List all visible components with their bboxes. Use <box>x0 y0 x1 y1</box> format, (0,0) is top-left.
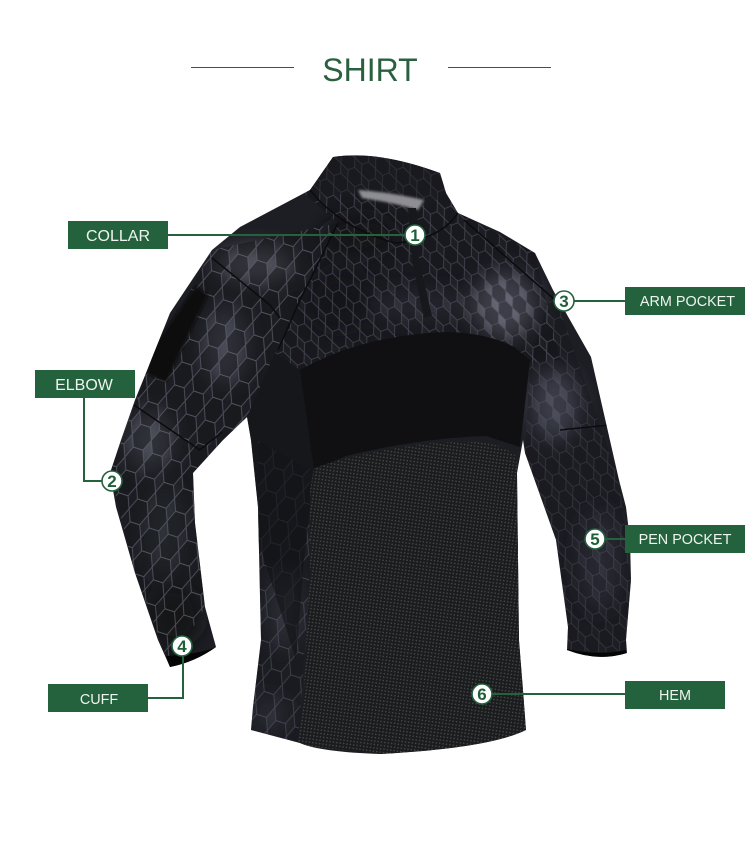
label: pen pocket <box>585 525 745 553</box>
seams <box>134 220 610 450</box>
side panel dark <box>247 353 314 660</box>
label: pen pocket: PEN POCKET <box>639 532 732 548</box>
camo hex texture: sleeves and yoke <box>275 157 560 370</box>
label: arm pocket <box>554 287 745 315</box>
label: arm pocket: ARM POCKET <box>640 294 735 310</box>
label: collar <box>68 221 425 249</box>
shirt illustration <box>100 150 640 760</box>
label: collar: COLLAR <box>86 228 150 245</box>
label: elbow: ELBOW <box>55 377 114 394</box>
camo blotches <box>126 215 620 733</box>
title: SHIRT <box>322 52 418 88</box>
collar seam <box>310 190 458 243</box>
label: cuff <box>48 636 192 712</box>
black chest panel <box>300 332 530 470</box>
label: elbow: 2 <box>107 472 117 491</box>
label: pen pocket: 5 <box>590 530 600 549</box>
sleeve patch <box>147 286 208 382</box>
collar band <box>310 155 446 207</box>
collar inner lining <box>358 190 424 210</box>
label: collar: 1 <box>410 226 420 245</box>
label: hem: HEM <box>659 688 691 704</box>
label: hem: 6 <box>477 685 487 704</box>
label: arm pocket: 3 <box>559 292 569 311</box>
label: elbow <box>35 370 135 491</box>
label: hem <box>472 681 725 709</box>
zipper placket <box>408 208 432 318</box>
cuff opening right <box>567 649 626 657</box>
label: cuff: 4 <box>177 637 187 656</box>
mesh torso panel <box>298 442 526 754</box>
cuff opening left <box>166 647 218 668</box>
label: cuff: CUFF <box>80 692 118 708</box>
